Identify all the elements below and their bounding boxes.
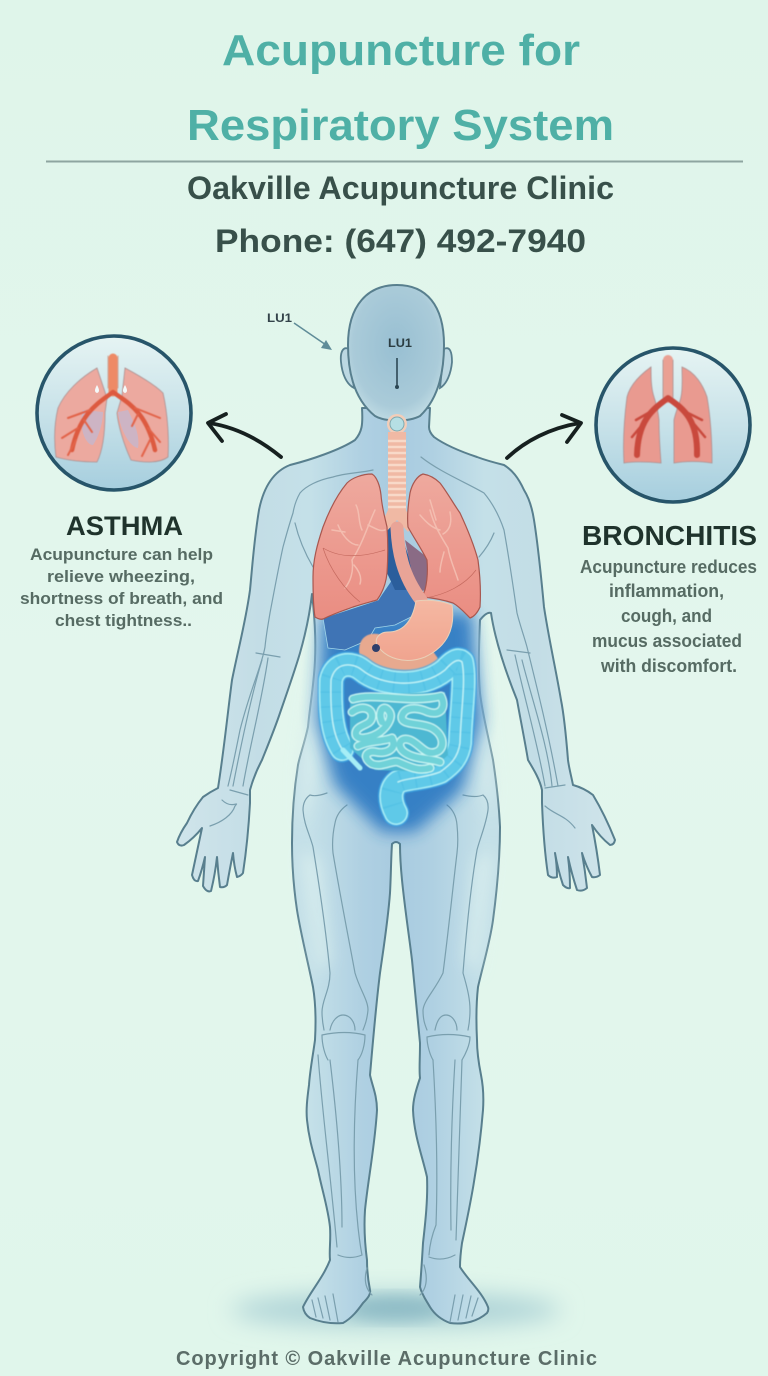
bronchitis left lung xyxy=(624,367,661,463)
arrow to asthma xyxy=(208,414,281,457)
bronchitis right lung xyxy=(674,367,712,463)
clinic name and phone: Oakville Acupuncture Clinic xyxy=(187,170,614,206)
stomach xyxy=(376,600,453,660)
needle xyxy=(395,358,399,389)
arrow to bronchitis xyxy=(507,415,581,458)
bronchitis description: Acupuncture reduces xyxy=(580,557,757,577)
right lung xyxy=(408,474,480,618)
bronchitis trachea and bronchi xyxy=(632,360,705,455)
bronchitis description: mucus associated xyxy=(592,631,742,651)
clinic name and phone xyxy=(187,170,614,259)
trachea xyxy=(381,432,413,532)
title: Acupuncture for xyxy=(222,26,580,75)
asthma right lung xyxy=(117,368,168,462)
asthma description: Acupuncture can help xyxy=(30,546,213,564)
clinic name and phone: Phone: (647) 492-7940 xyxy=(215,223,586,259)
LU1 pointer label and arrow: LU1 xyxy=(267,311,292,325)
liver area xyxy=(323,575,420,650)
human body figure xyxy=(177,285,615,1324)
LU1 pointer label and arrow xyxy=(267,311,332,350)
flank highlights xyxy=(300,600,494,975)
icon: bronchitis lungs circle xyxy=(596,348,750,502)
copyright footer: Copyright © Oakville Acupuncture Clinic xyxy=(176,1348,597,1370)
bronchitis description: cough, and xyxy=(621,606,712,626)
asthma description: chest tightness.. xyxy=(55,612,192,630)
floor shadow xyxy=(231,1292,561,1328)
head xyxy=(348,285,444,420)
bronchitis heading: BRONCHITIS xyxy=(582,520,757,551)
icon: asthma lungs circle xyxy=(37,336,191,490)
asthma description: shortness of breath, and xyxy=(20,590,223,608)
pancreas xyxy=(359,634,442,673)
asthma left lung xyxy=(55,368,107,462)
asthma heading: ASTHMA xyxy=(66,511,183,541)
label: LU1 on head: LU1 xyxy=(388,336,412,350)
central chest cavity xyxy=(386,525,420,590)
title: Respiratory System xyxy=(187,101,614,150)
asthma description xyxy=(20,546,223,630)
ears xyxy=(341,348,452,388)
asthma bronchi xyxy=(62,356,160,456)
body outline xyxy=(177,408,615,1324)
bronchitis description xyxy=(580,557,757,676)
large intestine xyxy=(331,660,464,813)
esophagus xyxy=(397,528,421,600)
small intestine xyxy=(350,692,448,772)
abdominal glow xyxy=(316,612,482,832)
bronchitis description: with discomfort. xyxy=(600,656,737,676)
asthma description: relieve wheezing, xyxy=(47,568,195,586)
bronchitis description: inflammation, xyxy=(609,581,724,601)
left lung xyxy=(313,474,388,619)
title xyxy=(187,26,614,150)
thyroid ring xyxy=(387,414,407,434)
skeleton lines xyxy=(210,457,575,1322)
